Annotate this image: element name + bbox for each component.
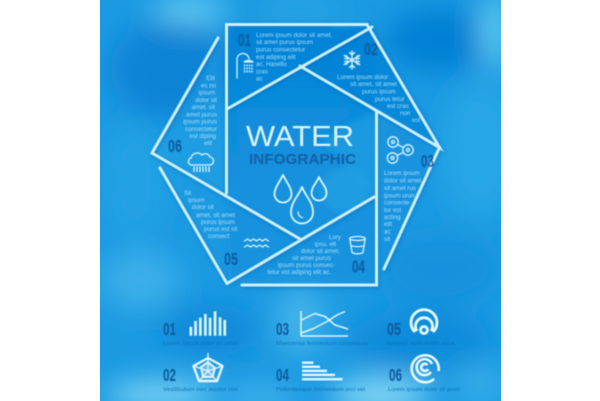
- panel 02: snowflake: purus tetur: [375, 96, 405, 103]
- panel 05: waves: consect: [208, 233, 230, 240]
- panel 06: rain cloud: Elit: [206, 75, 215, 82]
- subtitle: INFOGRAPHIC: INFOGRAPHIC: [249, 151, 356, 168]
- panel 02: snowflake: est cras: [387, 103, 409, 110]
- legend item 05: concentric arcs: [386, 310, 456, 347]
- legend item 06: spiral rings: Lorem ipsum dolor sit amet: [388, 387, 461, 393]
- panel 06: rain cloud: elit: [204, 140, 212, 147]
- blurred water background: [100, 0, 520, 401]
- icon: spiral rings: [412, 355, 439, 382]
- panel 02: snowflake: 02: [364, 39, 378, 59]
- icon: glass: [350, 236, 365, 254]
- icon: radar: [194, 353, 222, 381]
- legend item 01: bar chart: Lorem ipsum dolor sit amet: [163, 341, 239, 347]
- legend item 04: stepped bars: [276, 362, 365, 393]
- panel 03: molecule: Lorem ipsum: [384, 170, 420, 177]
- panel 01: shower: ac. Hasellu: [256, 61, 287, 68]
- legend item 05: concentric arcs: 05: [387, 319, 401, 339]
- panel 03: molecule: 03: [421, 151, 434, 171]
- panel 01: shower: est adiping elit: [256, 54, 296, 61]
- title: WATER: WATER: [246, 121, 354, 153]
- icon: line chart: [301, 311, 348, 336]
- panel 04: glass: ipsu. elt: [315, 241, 336, 248]
- legend item 05: concentric arcs: Aenean sollicitudin risus: [386, 341, 456, 347]
- hexagon interior shading: [175, 26, 432, 279]
- panel 03: molecule: [384, 137, 434, 243]
- icon: horizontal bars: [302, 362, 342, 380]
- icon: snowflake: [344, 51, 360, 69]
- panel 02: snowflake: [337, 39, 421, 124]
- panel 01: shower: ac: [256, 76, 263, 82]
- panel 04: glass: ipsum purus consec-: [278, 262, 335, 269]
- legend item 03: line chart: 03: [276, 319, 289, 339]
- hexagon spiral frame lines: [152, 24, 440, 285]
- panel 02: snowflake: est: [412, 117, 421, 124]
- panel 05: waves: 05: [224, 249, 238, 269]
- panel 04: glass: sit amet purus: [292, 255, 331, 262]
- panel 01: shower: [237, 30, 333, 82]
- panel 01: shower: cras: [256, 68, 268, 76]
- icon: molecule: [387, 137, 413, 163]
- panel 01: shower: purus consectetur: [256, 46, 305, 54]
- panel 04: glass: dolor sit amet,: [301, 248, 340, 255]
- icon: water drops: [274, 175, 326, 224]
- legend item 06: spiral rings: [388, 355, 461, 393]
- panel 02: snowflake: non: [400, 110, 411, 117]
- panel 05: waves: dolor sit: [192, 204, 214, 211]
- panel 02: snowflake: purus ipsum: [362, 88, 396, 96]
- panel 02: snowflake: Lorem ipsum dolor: [337, 74, 388, 81]
- panel 01: shower: Lorem ipsum dolor sit amet,: [256, 32, 333, 39]
- panel 04: glass: Lory: [329, 234, 342, 241]
- panel 06: rain cloud: ipsum purus: [183, 118, 217, 126]
- panel 04: glass: [267, 234, 365, 276]
- legend item 02: radar chart: Vestibulum nec auctor nisi: [163, 387, 238, 393]
- panel 05: waves: purus est sit: [204, 226, 238, 233]
- icon: concentric arches: [411, 310, 437, 334]
- panel 05: waves: ipsum: [188, 197, 205, 204]
- panel 06: rain cloud: dolor sit: [195, 97, 217, 104]
- panel 05: waves: Sit: [184, 190, 192, 197]
- legend item 04: stepped bars: 04: [276, 365, 289, 385]
- panel 01: shower: 01: [238, 30, 251, 50]
- legend item 03: line chart: Maecenas fermentum consequat: [276, 341, 369, 347]
- icon: shower: [237, 53, 253, 78]
- legend item 03: line chart: [276, 311, 369, 347]
- panel 03: molecule: sit amet rus: [384, 185, 416, 192]
- panel 03: molecule: acting: [384, 214, 401, 221]
- legend item 04: stepped bars: Pellentesque fermentum orci vel: [276, 387, 365, 393]
- panel 06: rain cloud: amet. sit: [192, 104, 215, 111]
- panel 06: rain cloud: [168, 75, 217, 172]
- icon: waves: [244, 239, 268, 247]
- panel 06: rain cloud: ipsum: [198, 90, 215, 96]
- panel 03: molecule: ipsum urun: [384, 192, 415, 200]
- line drop shadow: [153, 26, 440, 287]
- panel 04: glass: 04: [352, 256, 365, 276]
- panel 03: molecule: tur est: [384, 207, 401, 214]
- legend item 02: radar chart: 02: [163, 365, 176, 385]
- legend item 01: bar chart: 01: [163, 319, 176, 339]
- panel 03: molecule: ac: [384, 228, 391, 236]
- panel 05: waves: purus ipsum: [201, 219, 235, 226]
- panel 03: molecule: elit: [384, 221, 392, 228]
- icon: rain cloud: [188, 153, 214, 172]
- panel 06: rain cloud: es no: [201, 82, 217, 90]
- panel 06: rain cloud: est diping: [190, 133, 217, 140]
- icon: bars: [190, 311, 226, 336]
- panel 05: waves: amet, sit amet: [196, 212, 235, 219]
- panel 06: rain cloud: 06: [168, 136, 182, 156]
- panel 03: molecule: consecte-: [384, 200, 411, 206]
- panel 03: molecule: dolor sit amet,: [384, 178, 423, 184]
- panel 04: glass: tetur est adiping elit ac.: [267, 269, 331, 276]
- panel 01: shower: sit amet purus ipsum: [256, 39, 313, 46]
- panel 06: rain cloud: amet purus: [186, 112, 217, 118]
- legend item 02: radar chart: [163, 353, 238, 393]
- legend item 06: spiral rings: 06: [389, 365, 402, 385]
- panel 06: rain cloud: consectetur: [185, 126, 217, 133]
- panel 02: snowflake: sit amet, sit amet: [350, 81, 397, 88]
- legend item 01: bar chart: [163, 311, 239, 347]
- panel 03: molecule: sit: [384, 236, 390, 243]
- panel 05: waves: [184, 190, 268, 269]
